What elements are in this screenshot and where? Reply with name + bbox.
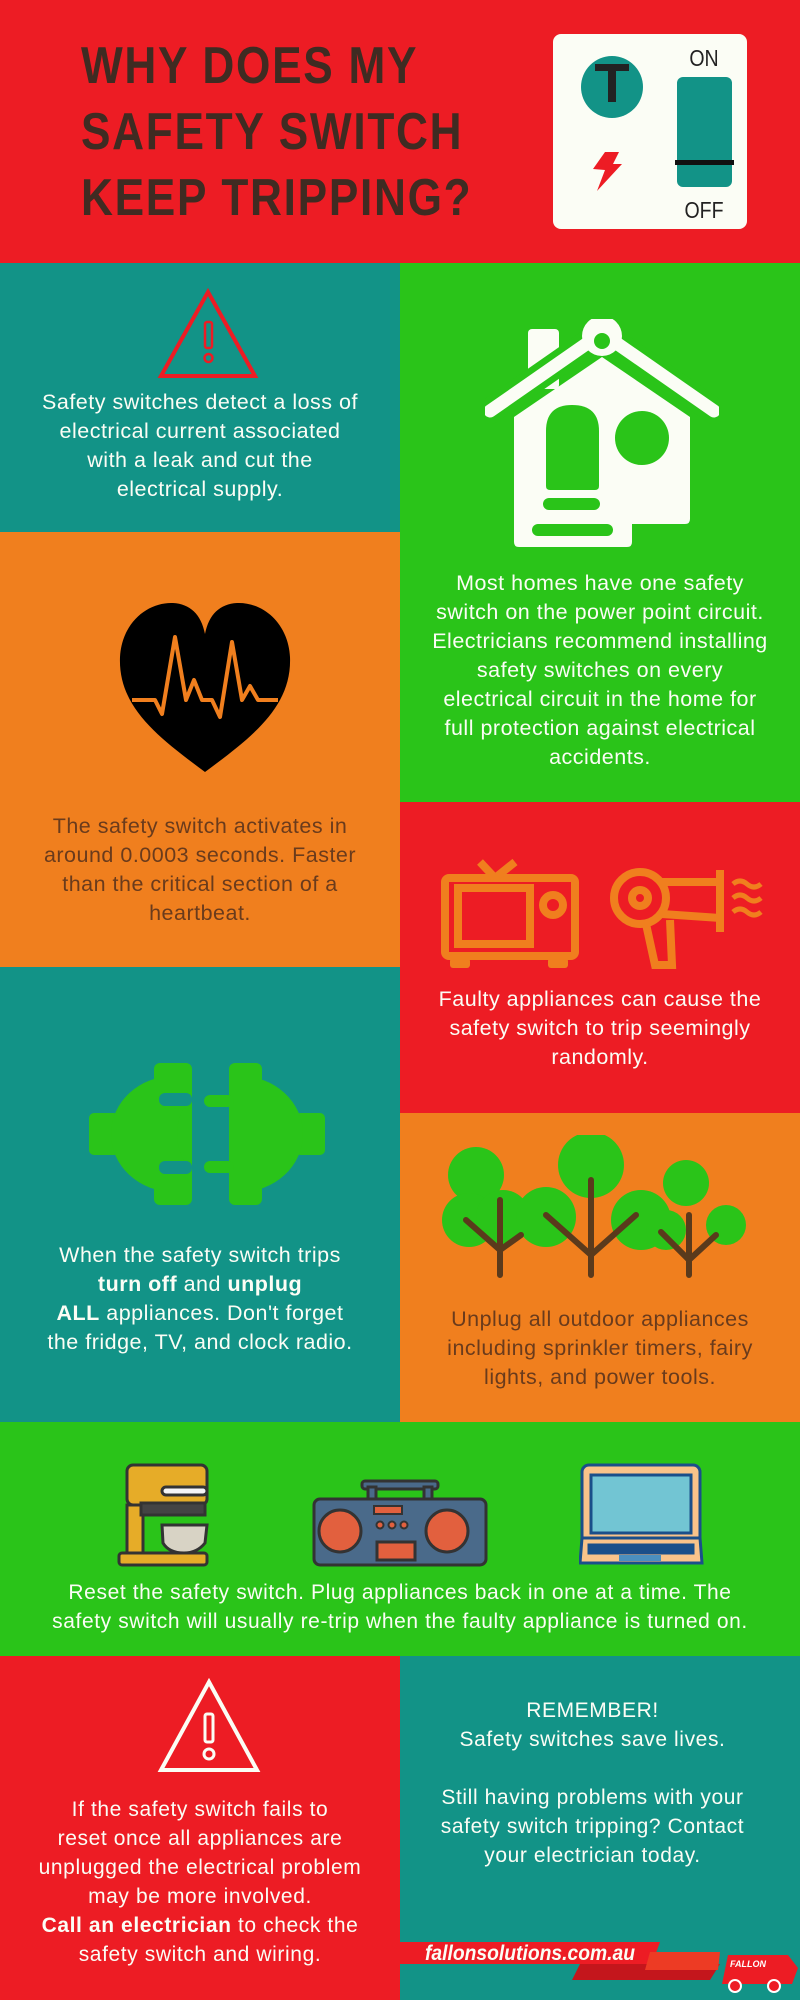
panel: remember (teal) — [400, 1656, 800, 2000]
text block — [44, 814, 356, 925]
text block: your electrician today. — [484, 1844, 701, 1867]
icon: tv and hair dryer — [441, 859, 762, 969]
text block: Electricians recommend installing — [432, 629, 768, 653]
icon: trees — [442, 1135, 746, 1278]
text block: Unplug all outdoor appliances — [451, 1307, 749, 1331]
text block: randomly. — [551, 1045, 649, 1069]
text block: safety switch will usually re-trip when the faulty appliance is turned on. — [52, 1610, 748, 1633]
text block: safety switch tripping? Contact — [441, 1815, 744, 1838]
text block: Still having problems with your — [441, 1786, 744, 1809]
text block: ALL appliances. Don't forget — [56, 1301, 344, 1325]
icon: laptop — [579, 1464, 704, 1564]
text block: may be more involved. — [88, 1885, 312, 1908]
text block — [447, 1307, 753, 1389]
text block: safety switches on every — [477, 658, 723, 682]
icon: boombox — [312, 1480, 488, 1566]
text block: electrical circuit in the home for — [443, 687, 757, 711]
icon: safety switch — [553, 34, 747, 229]
text block — [439, 987, 761, 1069]
title: KEEP TRIPPING? — [81, 169, 472, 227]
text block: REMEMBER! — [526, 1699, 659, 1722]
title: WHY DOES MY — [81, 37, 418, 95]
text block: switch on the power point circuit. — [436, 600, 764, 624]
text block: with a leak and cut the — [87, 448, 313, 472]
icon: van — [722, 1955, 798, 1992]
text block: safety switch to trip seemingly — [449, 1016, 751, 1040]
text block: If the safety switch fails to — [72, 1798, 328, 1821]
icon: plugs — [89, 1063, 325, 1205]
text block: around 0.0003 seconds. Faster — [44, 843, 356, 867]
icon: van: FALLON — [730, 1959, 766, 1969]
icon: house — [485, 319, 719, 547]
panel: reset (green) — [0, 1422, 800, 1656]
text block: reset once all appliances are — [58, 1827, 342, 1850]
text block: the fridge, TV, and clock radio. — [47, 1330, 353, 1354]
panel: call electrician (red) — [0, 1656, 400, 2000]
text block: full protection against electrical — [444, 716, 756, 740]
text block — [47, 1243, 353, 1354]
panel: heartbeat (orange) — [0, 532, 400, 967]
icon: warning triangle — [158, 1678, 260, 1772]
panel: unplug (teal) — [0, 967, 400, 1422]
text block — [441, 1699, 744, 1867]
text block: When the safety switch trips — [59, 1243, 341, 1267]
panel: faulty appliances (red) — [400, 802, 800, 1113]
icon: safety switch: OFF — [684, 198, 724, 223]
text block: safety switch and wiring. — [79, 1943, 321, 1966]
icon: safety switch: ON — [689, 46, 719, 71]
text block: Most homes have one safety — [456, 571, 744, 595]
icon: heart — [120, 603, 290, 772]
text block — [432, 571, 768, 769]
icon: stand mixer — [118, 1464, 209, 1566]
text block: Call an electrician to check the — [42, 1914, 358, 1937]
title: SAFETY SWITCH — [81, 103, 463, 161]
text block: lights, and power tools. — [484, 1365, 716, 1389]
logo banner: fallonsolutions.com.au — [425, 1942, 635, 1965]
text block: Reset the safety switch. Plug appliances back in one at a time. The — [68, 1581, 732, 1604]
text block: Faulty appliances can cause the — [439, 987, 761, 1011]
text block — [42, 390, 358, 501]
text block: Safety switches save lives. — [460, 1728, 725, 1751]
text block: heartbeat. — [149, 901, 251, 925]
text block: The safety switch activates in — [53, 814, 347, 838]
logo banner — [400, 1942, 798, 1993]
panel: outdoor (orange) — [400, 1113, 800, 1422]
text block: unplugged the electrical problem — [39, 1856, 361, 1879]
header panel — [0, 0, 800, 263]
text block — [39, 1798, 361, 1966]
text block: including sprinkler timers, fairy — [447, 1336, 753, 1360]
title — [81, 37, 472, 227]
text block: electrical supply. — [117, 477, 283, 501]
icon: warning triangle — [158, 288, 258, 378]
text block: than the critical section of a — [62, 872, 338, 896]
panel: most homes (green) — [400, 263, 800, 803]
text block: accidents. — [549, 745, 651, 769]
text block: turn off and unplug — [98, 1272, 302, 1296]
text block — [52, 1581, 748, 1633]
panel: detect loss (teal) — [0, 263, 400, 532]
text block: Safety switches detect a loss of — [42, 390, 358, 414]
text block: electrical current associated — [60, 419, 340, 443]
